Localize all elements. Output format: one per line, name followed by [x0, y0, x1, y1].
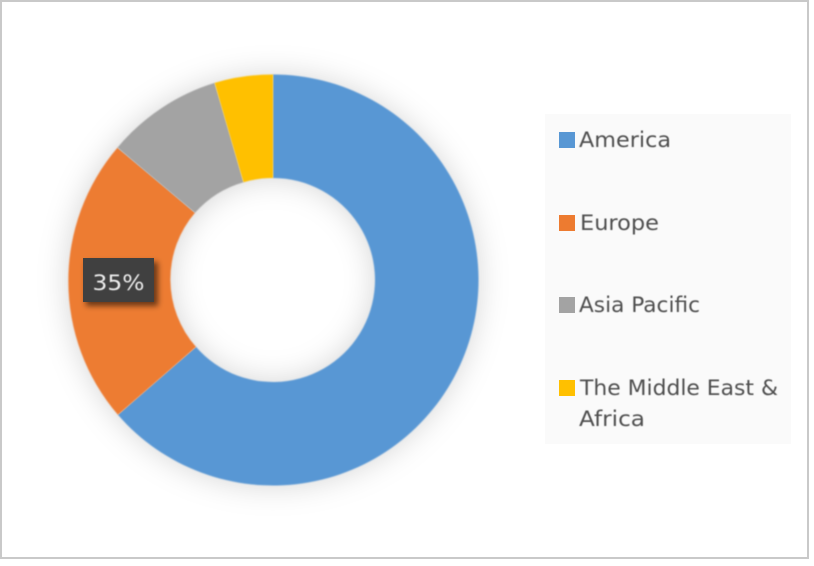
legend item: America: America: [579, 128, 671, 152]
legend item: Europe: Europe: [580, 211, 659, 235]
donut shadow: [68, 75, 479, 486]
data label: 35%: [83, 258, 158, 306]
legend item: Asia Pacific: Asia Pacific: [579, 293, 700, 317]
legend: [545, 114, 791, 444]
legend item: The Middle East & Africa: Africa: [579, 407, 645, 431]
segment: America: [118, 74, 479, 485]
legend item: The Middle East & Africa: [559, 376, 778, 431]
data label: 35%: 35%: [92, 271, 144, 295]
segment: Europe: [68, 148, 196, 415]
segment: Asia Pacific: [118, 83, 244, 213]
segment: The Middle East & Africa: [215, 74, 273, 182]
donut chart: [68, 74, 479, 486]
legend background: [545, 114, 791, 444]
legend item: The Middle East & Africa: The Middle East &: [579, 376, 778, 400]
